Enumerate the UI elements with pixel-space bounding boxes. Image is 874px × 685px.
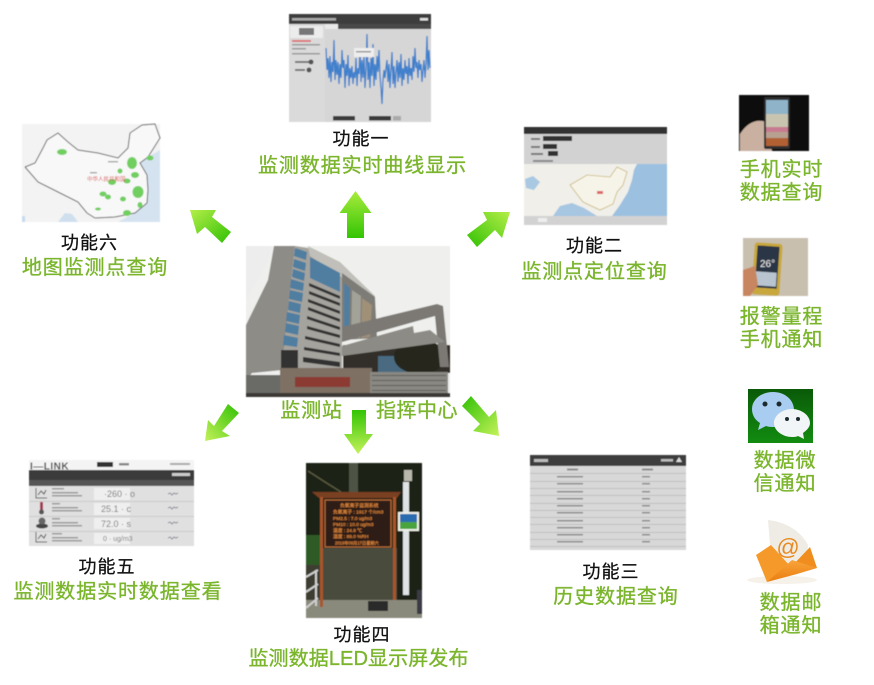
label: phone real-time data query line 2: 数据查询: [740, 181, 823, 204]
heading: function 1: 功能一: [332, 129, 390, 149]
photo: LED display board: [306, 463, 422, 618]
arrow: to function 3: [462, 396, 499, 436]
label: email notification: 箱通知: [760, 614, 822, 637]
photo: LED display board: 温度 : 24.9 ℃: [333, 527, 362, 534]
label: alarm range: 报警量程: [740, 305, 823, 328]
screenshot: I-LINK dashboard: ·260 · o: [104, 489, 135, 499]
screenshot: history data table: [530, 455, 686, 550]
arrow: to function 5: [205, 404, 239, 441]
screenshot: China map with monitoring points: 中华人民共和国: [87, 175, 126, 183]
photo: LED display board: PM10 : 10.0 ug/m3: [333, 522, 374, 528]
label: real-time data view: 监测数据实时数据查看: [14, 580, 222, 603]
photo: LED display board: 湿度 : 89.0 %RH: [333, 533, 369, 540]
screenshot: location map: [524, 127, 667, 225]
label: WeChat notification: 信通知: [754, 472, 816, 495]
screenshot: China map with monitoring points: [22, 124, 160, 222]
heading: function 2: 功能二: [566, 236, 623, 256]
arrow: to function 2: [467, 212, 510, 247]
label: phone real-time data query: 手机实时: [740, 158, 823, 181]
screenshot: I-LINK dashboard: [29, 460, 194, 546]
panel: function 3 history query: [530, 455, 686, 608]
label: data via WeChat: 数据微: [754, 449, 816, 472]
screenshot: I-LINK dashboard: 0 · ug/m3: [103, 536, 133, 543]
label: location query: 监测点定位查询: [521, 260, 668, 283]
arrow: up to function 1: [340, 191, 372, 238]
photo: LED display board: 负氧离子监测系统: [340, 502, 379, 509]
panel: function 1 real-time curve: [258, 14, 467, 177]
heading: function 3: 功能三: [582, 562, 640, 582]
arrow: to function 6: [190, 210, 231, 243]
photo: phone in hand: [739, 95, 809, 151]
heading: function 5: 功能五: [78, 557, 136, 577]
label: LED publishing: 监测数据LED显示屏发布: [248, 647, 469, 670]
arrow: to function 4: [344, 410, 373, 454]
photo: LED display board: PM2.5 : 7.0 ug/m3: [333, 516, 373, 522]
heading: function 6: 功能六: [61, 233, 118, 253]
panel: function 6 map query: [22, 124, 168, 279]
icon: WeChat: [748, 389, 813, 443]
screenshot: real-time curve chart: [289, 14, 431, 122]
screenshot: I-LINK dashboard: 25.1 · c: [101, 504, 132, 514]
photo: LED display board: 2019年08月17日星期六: [335, 540, 379, 546]
panel: function 4 LED display: [248, 463, 469, 670]
panel: function 5 real-time data view: [14, 460, 222, 603]
panel: function 2 location query: [521, 127, 668, 283]
screenshot: I-LINK dashboard: I—LINK: [30, 462, 69, 472]
label: monitoring station: 监测站: [280, 399, 343, 422]
panel: WeChat notification: [748, 389, 816, 495]
screenshot: I-LINK dashboard: 72.0 · s: [101, 519, 132, 529]
label: data via email: 数据邮: [760, 591, 822, 614]
label: map query: 地图监测点查询: [22, 256, 168, 279]
icon: email envelope: @: [776, 534, 800, 560]
photo: phone showing weather: 26°: [760, 259, 775, 270]
label: history query: 历史数据查询: [553, 585, 679, 608]
label: real-time curve: 监测数据实时曲线显示: [258, 154, 467, 177]
panel: alarm phone notification: [740, 238, 823, 351]
label: phone notification: 手机通知: [740, 328, 823, 351]
panel: email notification: [747, 520, 822, 637]
central photo: monitoring building: [246, 246, 450, 397]
heading: function 4: 功能四: [334, 625, 390, 645]
panel: phone real-time query: [739, 95, 823, 204]
photo: LED display board: 负氧离子 : 1917 个/cm3: [333, 508, 384, 516]
label: command center: 指挥中心: [376, 399, 458, 422]
